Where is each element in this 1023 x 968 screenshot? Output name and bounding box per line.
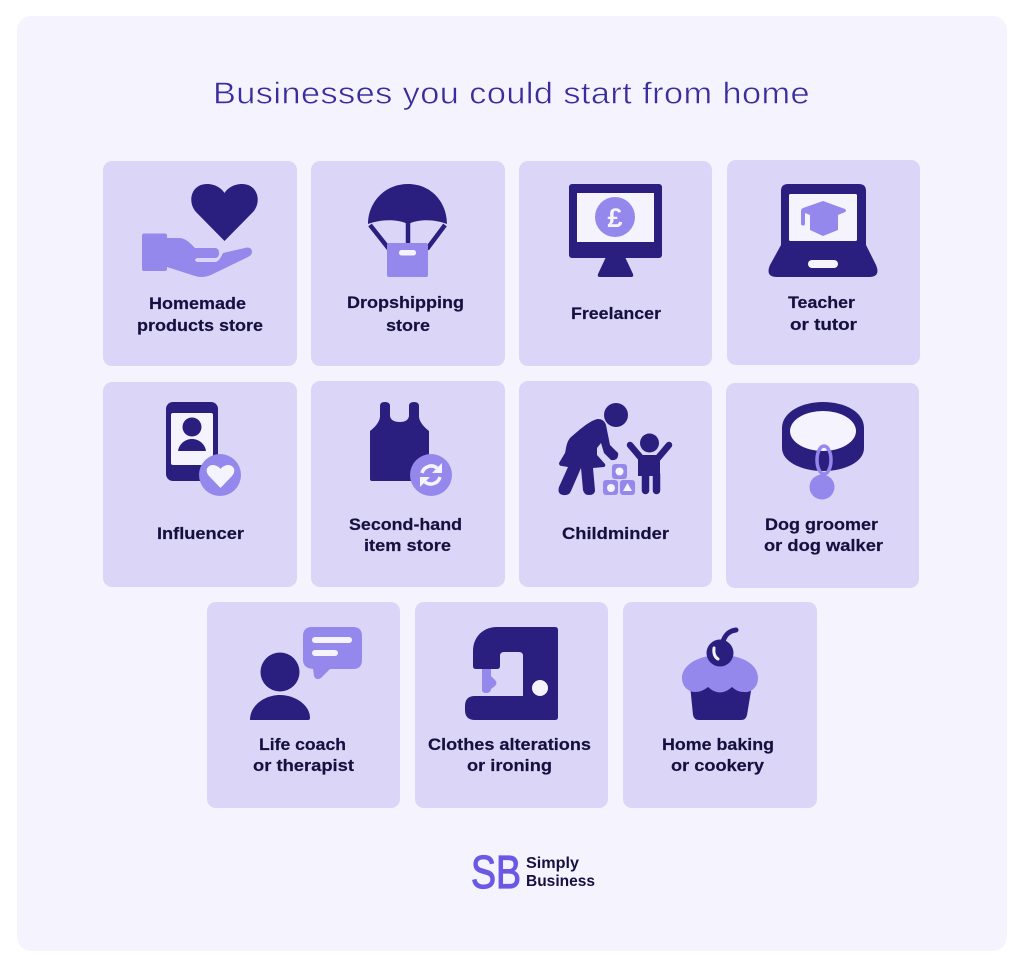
logo: Simply Business: Simply: [526, 855, 579, 872]
label: Dog groomer: [765, 515, 878, 534]
label: Life coach: [259, 735, 346, 754]
logo: Simply Business: [471, 846, 595, 898]
icon: monitor with pound coin: [569, 184, 662, 277]
card: dog groomer or dog walker: [726, 383, 919, 588]
label: or therapist: [253, 756, 354, 775]
label: [788, 293, 857, 334]
logo: Simply Business: SB: [471, 846, 521, 898]
card: influencer: [103, 382, 297, 587]
card: teacher or tutor: [727, 160, 920, 365]
label: Second-hand: [349, 515, 462, 534]
label: store: [386, 316, 430, 335]
icon: laptop with graduation cap: [769, 184, 877, 277]
label: Dropshipping: [347, 293, 464, 312]
label: [662, 735, 774, 775]
icon: phone with heart badge: [166, 402, 241, 496]
icon: adult and child with blocks: [558, 403, 669, 495]
label: Clothes alterations: [428, 735, 591, 754]
label: [137, 294, 263, 335]
title: Businesses you could start from home: [213, 76, 810, 110]
label: [764, 515, 883, 555]
icon: sewing machine: [465, 627, 558, 720]
label: Influencer: [157, 524, 244, 543]
label: or tutor: [790, 315, 857, 334]
label: Childminder: [562, 524, 669, 543]
label: [349, 515, 462, 555]
card: childminder: [519, 381, 712, 587]
label: or cookery: [671, 756, 765, 775]
label: Teacher: [788, 293, 855, 312]
card: dropshipping store: [311, 161, 505, 366]
icon: vest top with refresh badge: [370, 402, 452, 496]
logo: Simply Business: Business: [526, 873, 595, 890]
card: life coach or therapist: [207, 602, 400, 808]
label: or dog walker: [764, 536, 883, 555]
icon: cupcake: [682, 630, 758, 720]
label: [253, 735, 354, 775]
label: or ironing: [467, 756, 552, 775]
icon: parachute with box: [368, 184, 447, 277]
label: [428, 735, 591, 775]
label: Homemade: [149, 294, 246, 313]
icon: person with speech bubble: [250, 627, 362, 720]
icon: dog collar with tag: [782, 402, 864, 500]
icon: hand and heart: [142, 184, 258, 277]
icon: monitor with pound coin: £: [607, 203, 623, 233]
label: item store: [364, 536, 451, 555]
label: [347, 293, 464, 335]
label: products store: [137, 316, 263, 335]
card: second-hand item store: [311, 381, 505, 587]
card: clothes alterations or ironing: [415, 602, 608, 808]
label: Home baking: [662, 735, 774, 754]
card: home baking or cookery: [623, 602, 817, 808]
label: Freelancer: [571, 304, 661, 323]
card: freelancer: [519, 161, 712, 366]
card: homemade products store: [103, 161, 297, 366]
